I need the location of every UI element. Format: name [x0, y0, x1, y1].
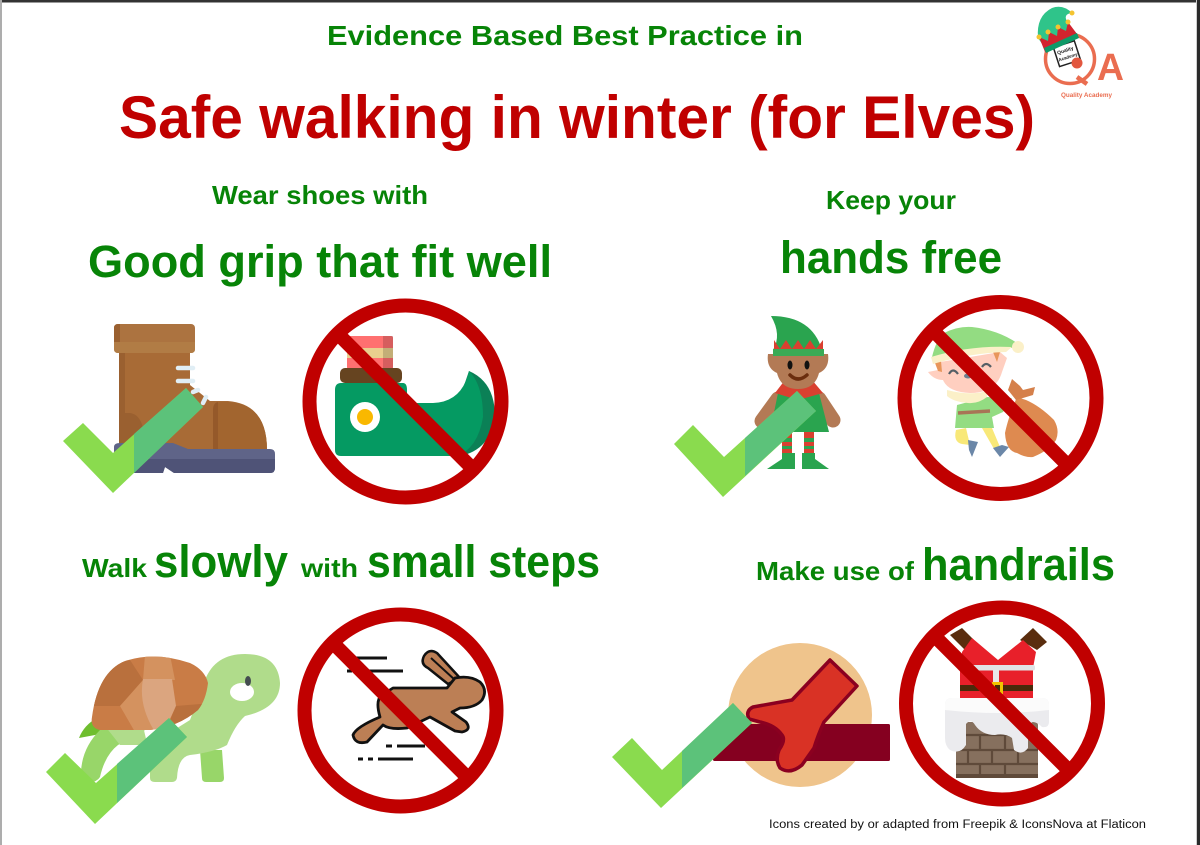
logo: Quality Academy: Academy	[1058, 51, 1079, 62]
no symbol: elf shoe	[310, 306, 502, 498]
logo: Quality Academy: Quality	[1057, 45, 1075, 56]
panel: hands free	[674, 185, 1096, 497]
handrails heading: handrails	[922, 539, 1115, 590]
panel: handrails	[612, 539, 1115, 808]
no symbol: hare	[304, 614, 496, 806]
icon: hand on rail	[713, 643, 890, 787]
walk slowly heading: with	[300, 553, 358, 583]
title: Safe walking in winter (for Elves)	[119, 84, 1035, 151]
icon: tortoise	[79, 650, 280, 782]
shoes heading: Good grip that fit well	[88, 236, 552, 287]
logo: Quality Academy: A	[1097, 47, 1124, 89]
check mark: boot	[63, 388, 203, 493]
no symbol: elf with sack	[904, 302, 1096, 494]
icon: Santa stuck in chimney	[945, 628, 1049, 778]
walk slowly heading: Walk	[82, 553, 148, 583]
handrails heading: Make use of	[756, 556, 914, 586]
panel: shoes	[63, 180, 552, 498]
icon: elf with sack	[928, 327, 1058, 457]
check mark: handrail	[612, 703, 752, 808]
logo: Quality Academy: Quality Academy	[1061, 92, 1112, 99]
logo: Quality Academy	[1036, 7, 1124, 99]
check mark: tortoise	[46, 718, 187, 824]
panel: walk slowly	[46, 536, 600, 824]
icon: running hare	[342, 651, 485, 759]
heading: evidence based best practice: Evidence Based Best Practice in	[327, 20, 803, 51]
walk slowly heading: small steps	[367, 536, 600, 587]
hands heading: hands free	[780, 232, 1002, 283]
shoes intro text: Wear shoes with	[212, 180, 428, 210]
handrails heading	[756, 539, 1115, 590]
check mark: elf	[674, 391, 816, 497]
hands intro text: Keep your	[826, 185, 956, 215]
walk slowly heading	[82, 536, 600, 587]
walk slowly heading: slowly	[154, 536, 288, 587]
icon: brown boot	[114, 324, 275, 473]
credit line: Icons created by or adapted from Freepik & IconsNova at Flaticon	[769, 819, 1146, 831]
no symbol: Santa	[906, 608, 1098, 800]
icon: elf standing	[762, 316, 833, 469]
icon: elf shoe	[335, 336, 495, 456]
